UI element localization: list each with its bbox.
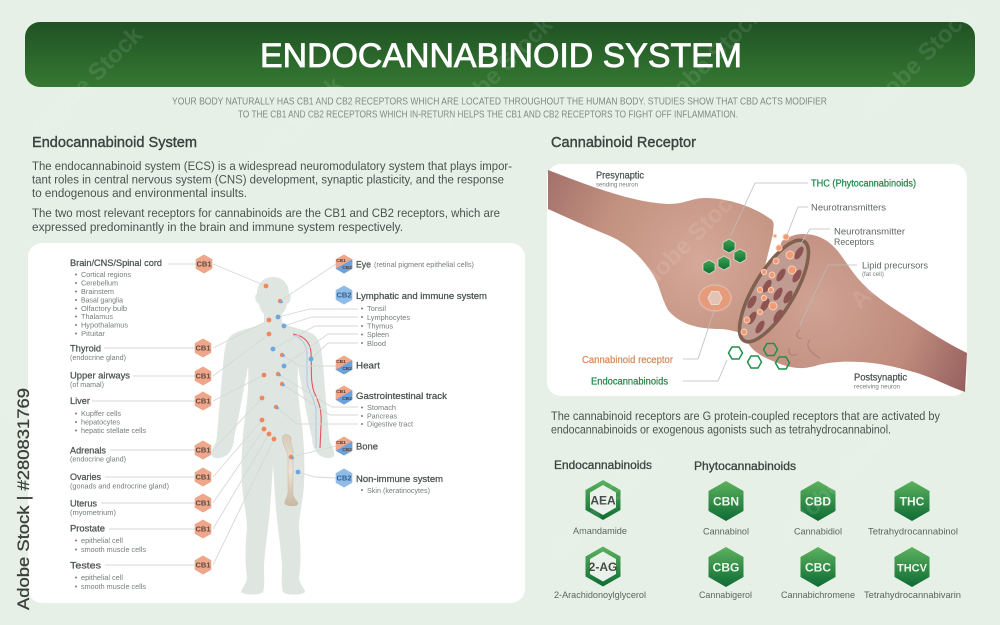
watermark: stock id: Adobe Stock | #280831769 (15, 388, 33, 610)
watermark: stock marks: Adobe Stock (845, 191, 968, 314)
label: testes: Testes (70, 560, 101, 572)
label: liver: hepatic stellate cells (81, 426, 146, 435)
header banner (25, 22, 975, 87)
label: brain: Brainstem (81, 287, 114, 296)
label: brain: Pituitar (81, 329, 105, 338)
presynaptic neuron (548, 170, 774, 334)
watermark: stock marks: Adobe Stock (855, 1, 978, 124)
text block: ECS description: tant roles in central nervous system (CNS) development, synaptic plasticity, and the response (32, 172, 504, 186)
neurotransmitter dots (741, 234, 796, 335)
label: endocannabinoids: Endocannabinoids (591, 376, 668, 388)
text block: ECS description: to endogenous and environmental insults. (32, 186, 247, 200)
human body silhouette (212, 277, 334, 595)
compound: AEA: Amandamide (573, 525, 627, 536)
compound: THC: THC (900, 494, 925, 508)
compound: THC (868, 481, 958, 536)
compound: 2-AG (554, 546, 646, 600)
label: upper airways: (of mamal) (70, 380, 104, 389)
compound: THC: Tetrahydrocannabinol (868, 526, 958, 536)
label: heart: Heart (356, 360, 380, 372)
label: THC: THC (Phytocannabinoids) (811, 178, 916, 190)
label: liver: Liver (70, 396, 91, 407)
icons: mixed CB1 and CB2 badges (336, 254, 352, 456)
heading: cannabinoid receptor: Cannabinoid Receptor (551, 134, 696, 151)
label: cannabinoid receptor: Cannabinoid receptor (582, 355, 674, 366)
watermark: stock marks: Adobe Stock (625, 181, 748, 304)
watermark: stock marks: Adobe Stock (645, 1, 768, 124)
compound: CBN (703, 481, 749, 536)
compound: CBD: CBD (805, 494, 831, 508)
label: testes: smooth muscle cells (81, 582, 146, 591)
connector lines (92, 264, 358, 565)
cannabinoid receptor icon (699, 285, 731, 311)
icons: mixed CB1 and CB2 badges: CB2 (342, 396, 352, 402)
label: gastrointestinal track: Digestive tract (367, 420, 414, 428)
watermark: stock marks: Adobe Stock (545, 441, 668, 564)
label: upper airways: Upper airways (70, 370, 130, 382)
compound: CBC (781, 547, 855, 600)
label: prostate: epithelial cell (81, 536, 123, 545)
heading: phytocannabinoids: Phytocannabinoids (694, 460, 796, 473)
label: lipid precursors (862, 260, 928, 278)
compound: CBC: Cannabichromene (781, 589, 855, 600)
text block: receptor description (551, 409, 941, 436)
label: brain: Brain/CNS/Spinal cord (70, 258, 162, 269)
label: brain (70, 258, 162, 338)
endocannabinoid outline hexagons (728, 344, 790, 369)
icons: mixed CB1 and CB2 badges: CB1 (336, 440, 346, 446)
icons: CB1 hexagon badges (195, 254, 212, 574)
compound: CBG: CBG (713, 560, 739, 574)
label: liver: Kupffer cells (81, 409, 121, 418)
heading: endocannabinoid system: Endocannabinoid System (32, 134, 197, 151)
label: lymphatic and immune system: Lymphatic and immune system (356, 291, 487, 302)
label: uterus: (myometrium) (70, 508, 116, 517)
icons: mixed CB1 and CB2 badges: CB1 (336, 258, 346, 264)
icons: CB1 hexagon badges: CB1 (195, 499, 211, 508)
label: lipid precursors: Lipid precursors (862, 260, 928, 272)
icons: CB2 badges: CB2 (336, 291, 352, 300)
watermark: stock marks: Adobe Stock (225, 71, 348, 194)
label: neurotransmitter receptors: Neurotransmitter (834, 226, 906, 238)
compound: AEA (573, 480, 627, 536)
text block: ECS description: expressed predominantly in the brain and immune system respectively. (32, 220, 403, 234)
text block: receptor description: endocannabinoids or exogenous agonists such as tetrahydrocannabinol. (551, 422, 891, 436)
compound: THCV: Tetrahydrocannabivarin (864, 589, 961, 600)
watermark: stock marks: Adobe Stock (435, 11, 558, 134)
label: liver: hepatocytes (81, 418, 120, 426)
label: presynaptic: Presynaptic (596, 170, 644, 182)
compound: THCV: THCV (897, 562, 928, 574)
label: brain: Basal ganglia (81, 296, 124, 304)
label: lymphatic and immune system: Spleen (367, 330, 389, 339)
icons: CB1 hexagon badges: CB1 (195, 397, 211, 406)
femur bone (283, 435, 298, 506)
icons: CB1 hexagon badges: CB1 (195, 344, 211, 353)
label: upper airways (70, 370, 130, 389)
subtitle (172, 96, 827, 120)
label: postsynaptic: Postsynaptic (854, 372, 907, 384)
label: postsynaptic (854, 372, 907, 390)
label: brain: Cortical regions (81, 270, 131, 279)
label: eye: Eye (356, 260, 371, 270)
compound: 2-AG: 2-AG (589, 560, 617, 574)
label: prostate (70, 524, 146, 554)
label: gastrointestinal track: Stomach (367, 403, 396, 412)
icons: mixed CB1 and CB2 badges: CB1 (336, 389, 346, 395)
compound: CBG (699, 547, 752, 600)
label: lymphatic and immune system: Thymus (367, 322, 393, 330)
text block: receptor description: The cannabinoid receptors are G protein-coupled receptors that are activated by (551, 409, 941, 423)
title: ENDOCANNABINOID SYSTEM (260, 37, 742, 75)
receptor location dots (260, 284, 313, 474)
text block: ECS description: The two most relevant receptors for cannabinoids are the CB1 and CB2 receptors, which are (32, 206, 500, 220)
label: prostate: Prostate (70, 524, 105, 534)
icons: mixed CB1 and CB2 badges: CB1 (336, 359, 346, 365)
label: lipid precursors: (fat cell) (862, 271, 884, 278)
label: presynaptic: sending neuron (596, 182, 638, 188)
leader lines (683, 183, 857, 381)
compound: CBG: Cannabigerol (699, 589, 752, 600)
heading: endocannabinoids: Endocannabinoids (554, 459, 652, 472)
label: non-immune system: Skin (keratinocytes) (367, 486, 430, 495)
label: neurotransmitter receptors: Receptors (834, 237, 874, 248)
panel: synapse diagram (547, 164, 967, 396)
icons: mixed CB1 and CB2 badges: CB2 (342, 366, 352, 372)
label: testes (70, 560, 146, 591)
compound: CBD: Cannabidiol (794, 526, 842, 536)
compound: CBD (794, 481, 842, 536)
label: ovaries: Ovaries (70, 472, 101, 483)
label: ovaries (70, 472, 169, 490)
subtitle: TO THE CB1 AND CB2 RECEPTORS WHICH IN-RETURN HELPS THE CB1 AND CB2 RECEPTORS TO FIGHT OFF INFLAMMATION. (238, 110, 738, 120)
label: lymphatic and immune system (356, 291, 487, 348)
compound: CBC: CBC (805, 560, 831, 574)
label: eye: (retinal pigment epithelial cells) (374, 260, 474, 269)
label: neurotransmitters: Neurotransmitters (811, 202, 886, 214)
label: thyroid: Thyroid (70, 344, 101, 354)
label: brain: Cerebellum (81, 278, 118, 288)
compound: CBN: Cannabinol (703, 526, 749, 536)
icons: CB1 hexagon badges: CB1 (196, 260, 212, 269)
label: prostate: smooth muscle cells (81, 545, 146, 554)
icons: CB1 hexagon badges: CB1 (195, 525, 211, 534)
label: non-immune system: Non-immune system (356, 474, 443, 485)
text block: ECS description (32, 159, 512, 234)
icons: CB1 hexagon badges: CB1 (195, 561, 211, 570)
label: brain: Hypothalamus (81, 320, 128, 330)
icons: CB2 badges (336, 286, 352, 488)
text block: ECS description: The endocannabinoid system (ECS) is a widespread neuromodulatory system that plays impor- (32, 159, 512, 173)
arm blood vessels (293, 334, 321, 448)
label: uterus (70, 498, 116, 517)
label: neurotransmitter receptors (834, 226, 906, 248)
label: gastrointestinal track (356, 391, 447, 428)
icons: mixed CB1 and CB2 badges: CB2 (342, 265, 352, 271)
icons: CB1 hexagon badges: CB1 (195, 446, 211, 455)
synaptic membrane with receptors (727, 231, 821, 351)
label: liver (70, 396, 146, 435)
compound: THCV (864, 547, 961, 600)
label: adrenals: (endocrine gland) (70, 454, 126, 464)
label: gastrointestinal track: Pancreas (367, 412, 397, 420)
label: lymphatic and immune system: Blood (367, 339, 386, 348)
label: ovaries: (gonads and endrocrine gland) (70, 482, 169, 490)
lipid precursor marks (789, 330, 820, 358)
label: gastrointestinal track: Gastrointestinal track (356, 391, 447, 402)
label: eye (356, 260, 474, 270)
label: bone: Bone (356, 442, 378, 452)
watermark: stock marks: Adobe Stock (25, 21, 148, 144)
label: thyroid (70, 344, 126, 362)
icons: CB1 hexagon badges: CB1 (195, 372, 211, 381)
icons: CB1 hexagon badges: CB1 (195, 473, 211, 482)
subtitle: YOUR BODY NATURALLY HAS CB1 AND CB2 RECEPTORS WHICH ARE LOCATED THROUGHOUT THE HUMAN BODY. STUDIES SHOW THAT CBD ACTS MODIFIER (172, 96, 827, 108)
label: lymphatic and immune system: Lymphocytes (367, 313, 410, 322)
label: testes: epithelial cell (81, 573, 123, 582)
label: postsynaptic: receiving neuron (854, 384, 900, 390)
label: brain: Thalamus (81, 312, 113, 321)
watermark: stock marks: Adobe Stock (775, 421, 898, 544)
label: uterus: Uterus (70, 498, 97, 510)
compound: AEA: AEA (590, 494, 616, 508)
label: thyroid: (endocrine gland) (70, 353, 126, 362)
THC green hexagons (703, 239, 746, 274)
compound: 2-AG: 2-Arachidonoylglycerol (554, 589, 646, 600)
label: non-immune system (356, 474, 443, 495)
label: presynaptic (596, 170, 644, 188)
postsynaptic neuron (745, 234, 967, 392)
icons: CB2 badges: CB2 (336, 474, 352, 483)
label: adrenals (70, 446, 126, 464)
label: lymphatic and immune system: Tonsil (367, 304, 386, 313)
compound: CBN: CBN (713, 494, 739, 508)
panel: body map (28, 243, 525, 603)
label: brain: Olfactory bulb (81, 304, 127, 313)
label: adrenals: Adrenals (70, 446, 106, 456)
icons: mixed CB1 and CB2 badges: CB2 (342, 447, 352, 453)
